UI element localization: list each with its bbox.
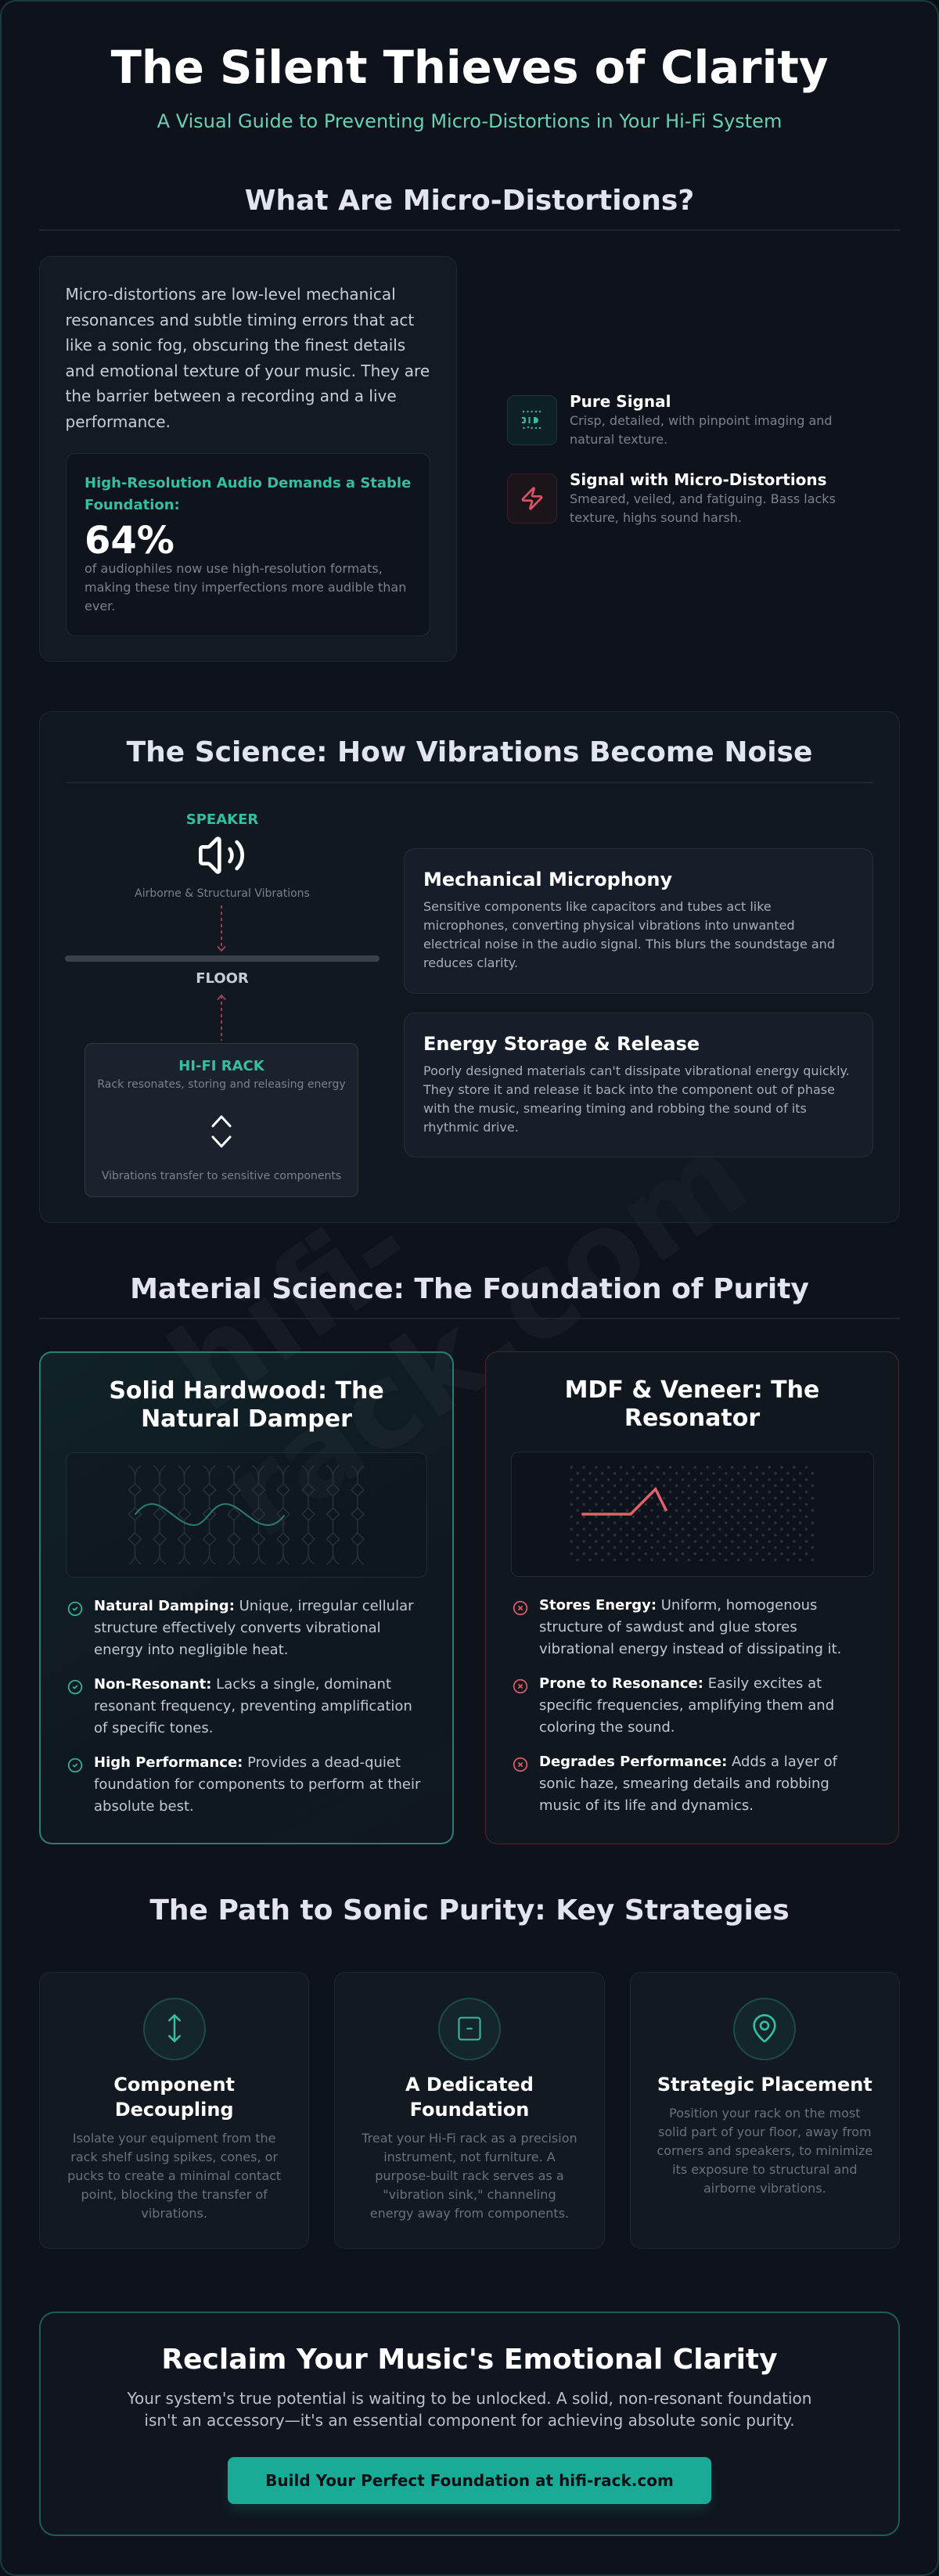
mdf title: Resonator (624, 1405, 760, 1432)
non-resonant text (94, 1676, 412, 1736)
natural damping text: structure effectively converts vibrational (94, 1620, 381, 1636)
heading: path to sonic purity: The Path to Sonic Purity: Key Strategies (149, 1894, 790, 1927)
microphony title: Mechanical Microphony (423, 869, 672, 890)
energy title: Energy Storage & Release (423, 1033, 700, 1055)
stores energy text (539, 1597, 841, 1657)
rack caption: Rack resonates, storing and releasing energy (97, 1078, 346, 1091)
legend: pure signal (507, 392, 833, 447)
microphony text: electrical noise in the audio signal. This blurs the soundstage and (423, 937, 835, 952)
prone to resonance text: Prone to Resonance: Easily excites at (539, 1675, 822, 1692)
decoupling title: Component (113, 2074, 235, 2096)
benefit: high performance (67, 1754, 421, 1815)
heading: material science: Material Science: The Foundation of Purity (130, 1273, 809, 1305)
icon: check (67, 1758, 83, 1773)
decoupling text: rack shelf using spikes, cones, or (70, 2150, 278, 2164)
statistic: 64% (85, 519, 174, 563)
prone to resonance text: coloring the sound. (539, 1719, 675, 1736)
icon: check (67, 1601, 83, 1617)
strategy card: strategic placement (630, 1972, 900, 2249)
distorted signal description (570, 491, 836, 525)
cta text: Your system's true potential is waiting to be unlocked. A solid, non-resonant foundation (127, 2389, 811, 2408)
heading: what are micro-distortions: What Are Micro-Distortions? (245, 185, 694, 217)
degrades performance text: sonic haze, smearing details and robbing (539, 1775, 829, 1792)
high performance text: High Performance: Provides a dead-quiet (94, 1754, 401, 1771)
benefit: natural damping (67, 1598, 414, 1658)
icon: check (67, 1679, 83, 1695)
decoupling text: vibrations. (141, 2206, 207, 2221)
arrow: up to floor (218, 994, 225, 1041)
legend: distorted signal (507, 470, 836, 525)
distorted signal description: Smeared, veiled, and fatiguing. Bass lacks (570, 491, 836, 506)
cta heading: Reclaim Your Music's Emotional Clarity (161, 2344, 778, 2376)
icon: lightning bolt (507, 473, 557, 523)
degrades performance text: music of its life and dynamics. (539, 1797, 754, 1814)
placement text: its exposure to structural and (672, 2162, 858, 2177)
energy text: Poorly designed materials can't dissipate vibrational energy quickly. (423, 1063, 850, 1078)
statistic caption: ever. (85, 599, 115, 613)
non-resonant text: Non-Resonant: Lacks a single, dominant (94, 1676, 391, 1693)
hardwood title (109, 1377, 384, 1433)
distorted signal description: texture, highs sound harsh. (570, 510, 742, 525)
callout heading (85, 475, 411, 513)
stores energy text: vibrational energy instead of dissipating it. (539, 1641, 841, 1657)
transfer caption: Vibrations transfer to sensitive components (102, 1170, 341, 1182)
subtitle: A Visual Guide to Preventing Micro-Distortions in Your Hi-Fi System (157, 110, 782, 132)
pure signal description (570, 413, 833, 447)
hi-fi rack box (85, 1043, 358, 1197)
decoupling text (67, 2131, 281, 2221)
definition text: like a sonic fog, obscuring the finest details (66, 336, 405, 354)
floor bar (65, 955, 380, 962)
floor label: FLOOR (196, 970, 249, 987)
natural damping text: energy into negligible heat. (94, 1642, 288, 1658)
placement text: airborne vibrations. (703, 2181, 826, 2196)
energy text: rhythmic drive. (423, 1120, 519, 1135)
natural damping text (94, 1598, 414, 1658)
foundation text: energy away from components. (370, 2206, 569, 2221)
foundation title: A Dedicated (405, 2074, 534, 2096)
placement text: corners and speakers, to minimize (657, 2143, 872, 2158)
microphony text: Sensitive components like capacitors and tubes act like (423, 899, 772, 914)
panel: call to action (39, 2312, 900, 2536)
hardwood title: Solid Hardwood: The (109, 1377, 384, 1405)
energy text (423, 1063, 850, 1135)
foundation text: "vibration sink," channeling (383, 2187, 556, 2202)
prone to resonance text (539, 1675, 834, 1736)
icon: cross (513, 1758, 527, 1772)
cta button (228, 2457, 711, 2504)
energy text: They store it and release it back into the component out of phase (423, 1082, 835, 1097)
microphony text: reduces clarity. (423, 955, 518, 970)
cta text: isn't an accessory—it's an essential component for achieving absolute sonic purity. (144, 2411, 795, 2430)
watermark: hifi- (146, 1178, 437, 1437)
drawback: degrades performance (513, 1754, 837, 1814)
decoupling text: Isolate your equipment from the (73, 2131, 275, 2146)
arrow: down to floor (218, 905, 225, 952)
strategy card: dedicated foundation (334, 1972, 605, 2249)
decoupling title: Decoupling (115, 2099, 234, 2121)
vibration path diagram (65, 811, 380, 1197)
callout heading: Foundation: (85, 497, 180, 513)
panel: definition (39, 256, 457, 662)
callout: 64 percent statistic (66, 453, 430, 636)
high performance text: absolute best. (94, 1798, 194, 1815)
icon: cross (513, 1601, 527, 1615)
drawback: stores energy (513, 1597, 841, 1657)
drawback: prone to resonance (513, 1675, 834, 1736)
rack label: HI-FI RACK (178, 1058, 264, 1074)
foundation text (362, 2131, 577, 2221)
pure signal description: Crisp, detailed, with pinpoint imaging and (570, 413, 833, 428)
card: mechanical microphony (404, 848, 873, 994)
hardwood title: Natural Damper (141, 1405, 352, 1433)
placement text (657, 2106, 872, 2196)
icon: pure waveform (507, 395, 557, 445)
panel: the science (39, 711, 900, 1223)
heading: the science: The Science: How Vibrations Become Noise (127, 736, 812, 768)
speaker label: SPEAKER (186, 811, 258, 828)
non-resonant text: of specific tones. (94, 1720, 213, 1736)
degrades performance text (539, 1754, 837, 1814)
prone to resonance text: specific frequencies, amplifying them and (539, 1697, 834, 1714)
mdf title: MDF & Veneer: The (565, 1376, 819, 1404)
placement text: Position your rack on the most (669, 2106, 861, 2121)
callout heading: High-Resolution Audio Demands a Stable (85, 475, 411, 491)
definition text: Micro-distortions are low-level mechanical (66, 285, 396, 304)
statistic caption: making these tiny imperfections more audible than (85, 580, 406, 595)
placement title: Strategic Placement (657, 2074, 872, 2096)
pure signal title: Pure Signal (570, 392, 671, 411)
panel: solid hardwood (39, 1351, 454, 1844)
stores energy text: structure of sawdust and glue stores (539, 1619, 797, 1635)
stores energy text: Stores Energy: Uniform, homogenous (539, 1597, 817, 1614)
energy text: with the music, smearing timing and robbing the sound of its (423, 1101, 807, 1116)
definition text: performance. (66, 412, 171, 430)
cta button: Build Your Perfect Foundation at hifi-rack.com (265, 2471, 674, 2490)
foundation title: Foundation (410, 2099, 529, 2121)
airborne vibrations caption: Airborne & Structural Vibrations (135, 887, 310, 900)
card: energy storage (404, 1013, 873, 1157)
high performance text (94, 1754, 421, 1815)
definition text: the barrier between a recording and a live (66, 387, 397, 405)
icon: map pin (733, 1998, 796, 2060)
pure signal description: natural texture. (570, 432, 667, 447)
watermark: rack.com (200, 1108, 772, 1564)
high performance text: foundation for components to perform at their (94, 1776, 420, 1793)
panel: mdf and veneer (485, 1351, 899, 1844)
foundation title (405, 2074, 534, 2121)
distorted signal title: Signal with Micro-Distortions (570, 470, 827, 489)
hardwood cellular diagram (66, 1452, 427, 1578)
icon: vibration chevrons (211, 1115, 232, 1148)
non-resonant text: resonant frequency, preventing amplification (94, 1698, 412, 1714)
microphony text: microphones, converting physical vibrations into unwanted (423, 918, 795, 933)
foundation text: instrument, not furniture. A (383, 2150, 556, 2164)
statistic caption (85, 561, 406, 613)
benefit: non-resonant (67, 1676, 412, 1736)
icon: cross (513, 1679, 527, 1693)
natural damping text: Natural Damping: Unique, irregular cellular (94, 1598, 414, 1614)
cta text (127, 2389, 811, 2430)
foundation text: Treat your Hi-Fi rack as a precision (362, 2131, 577, 2146)
mdf dot diagram (511, 1452, 874, 1577)
statistic caption: of audiophiles now use high-resolution formats, (85, 561, 383, 576)
decoupling text: pucks to create a minimal contact (67, 2168, 281, 2183)
icon: speaker (199, 836, 244, 874)
title: The Silent Thieves of Clarity (111, 41, 828, 94)
icon: vertical arrows (143, 1998, 206, 2060)
decoupling text: point, blocking the transfer of (81, 2187, 268, 2202)
foundation text: purpose-built rack serves as a (375, 2168, 564, 2183)
decoupling title (113, 2074, 235, 2121)
placement text: solid part of your floor, away from (658, 2124, 872, 2139)
microphony text (423, 899, 835, 970)
degrades performance text: Degrades Performance: Adds a layer of (539, 1754, 837, 1770)
definition text: resonances and subtle timing errors that act (66, 310, 414, 329)
strategy card: component decoupling (39, 1972, 309, 2249)
definition text: and emotional texture of your music. They are (66, 362, 430, 380)
definition text (66, 285, 430, 430)
mdf title (565, 1376, 819, 1432)
icon: rack square (438, 1998, 501, 2060)
